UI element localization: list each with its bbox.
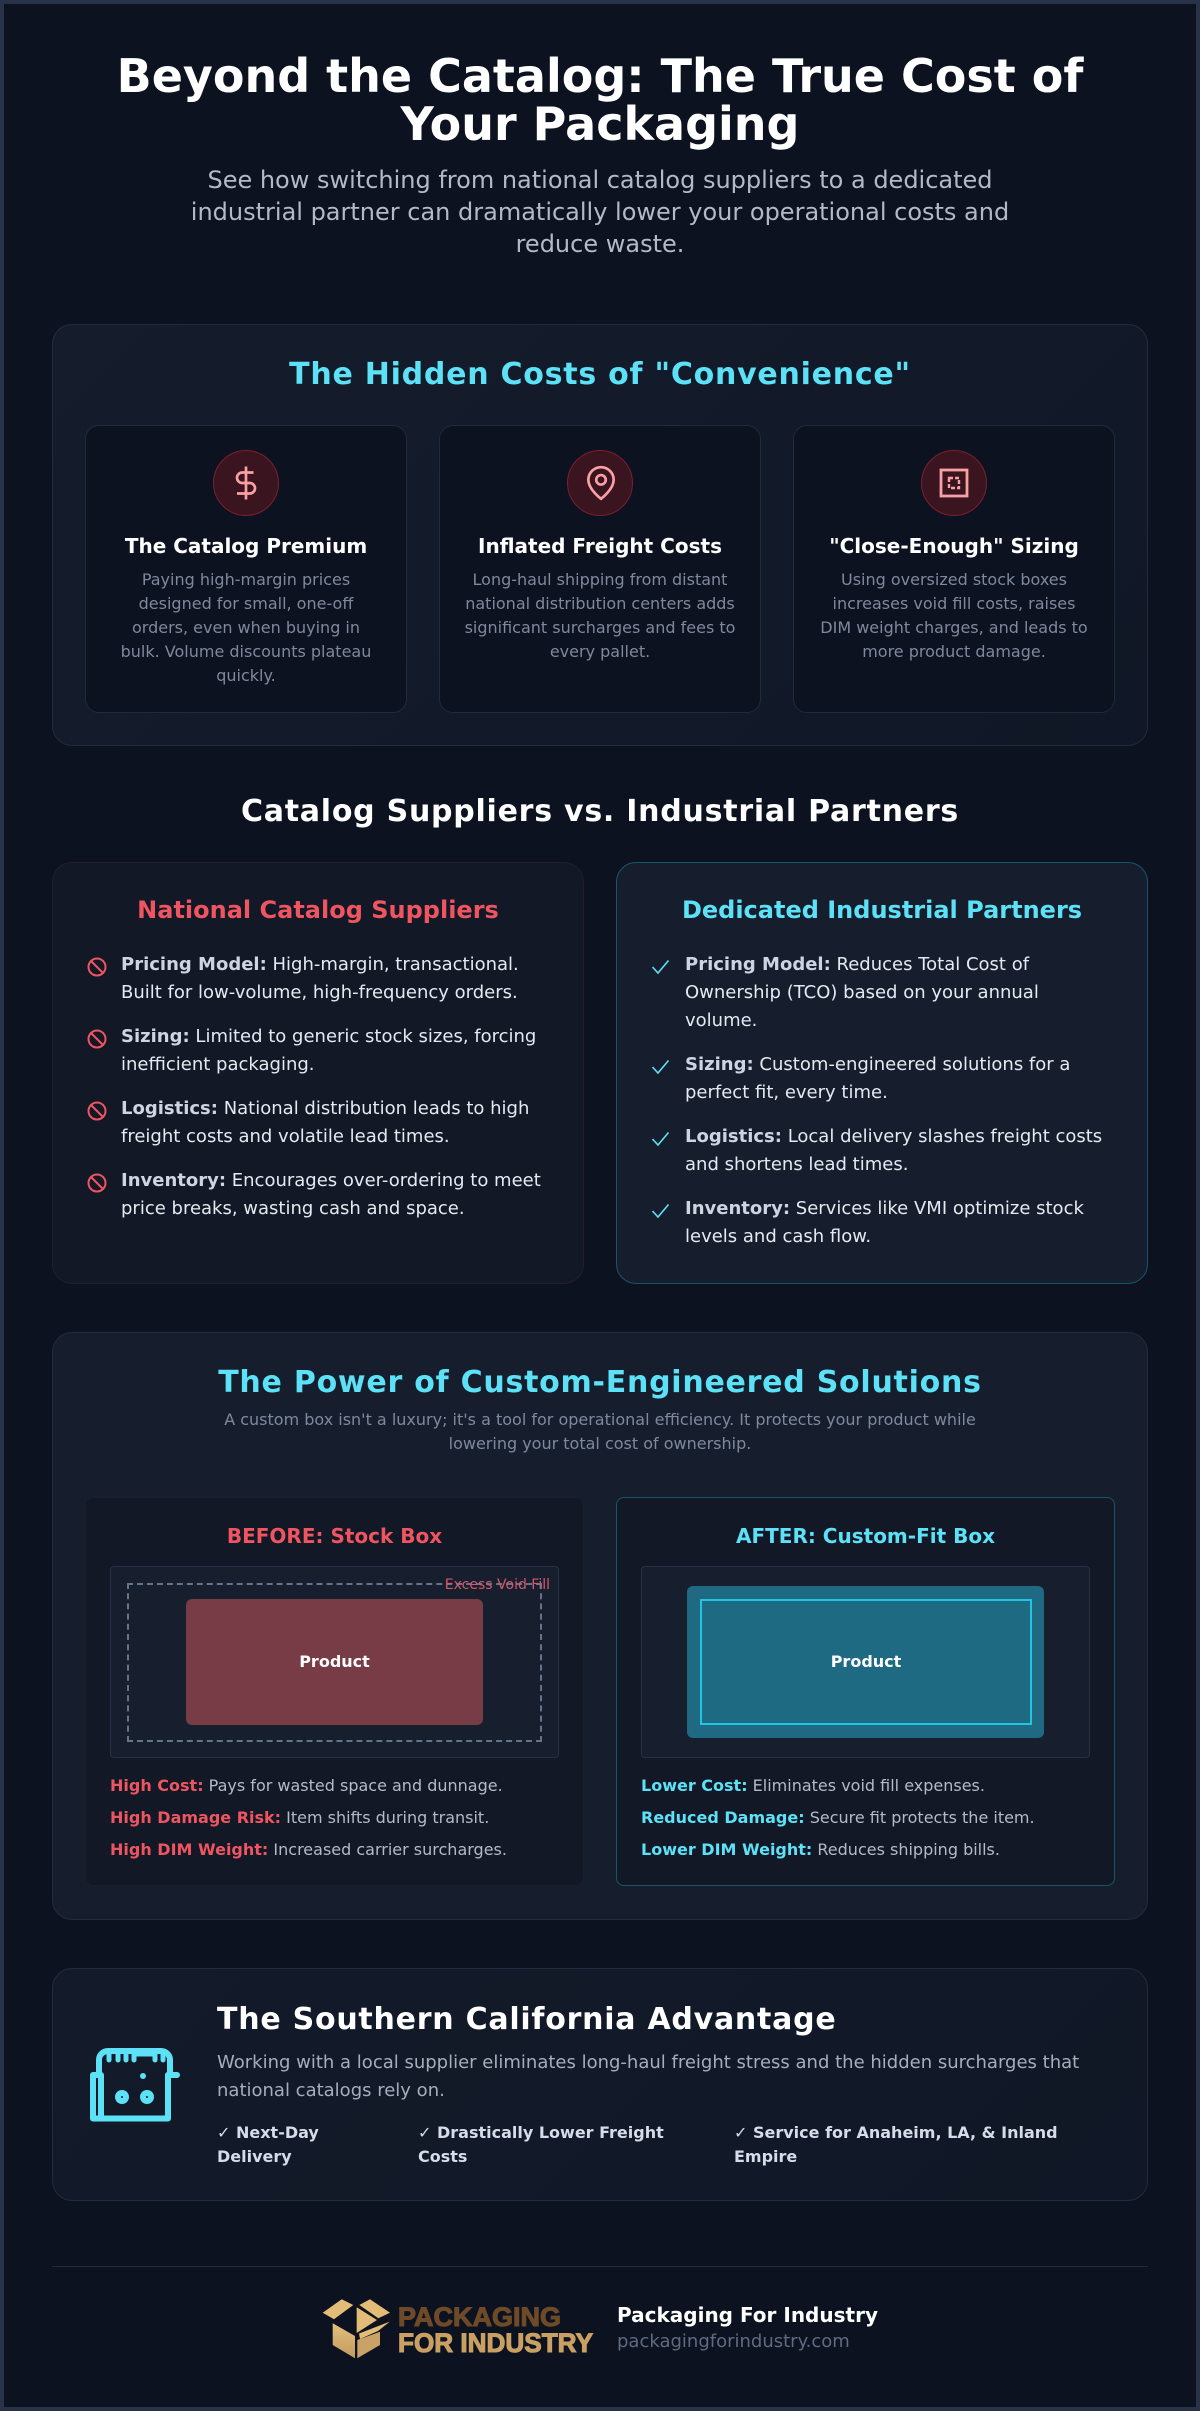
icon: dollar bbox=[213, 450, 279, 516]
intro text: lowering your total cost of ownership. bbox=[449, 1434, 751, 1453]
item text: inefficient packaging. bbox=[121, 1054, 315, 1075]
item text: Logistics: National distribution leads to high bbox=[121, 1098, 529, 1119]
card title: Inflated Freight Costs bbox=[478, 534, 722, 558]
benefit: service area: ✓ Service for Anaheim, LA, & Inland bbox=[734, 2123, 1058, 2142]
card text: Long-haul shipping from distant bbox=[473, 570, 727, 589]
subtitle: See how switching from national catalog suppliers to a dedicated bbox=[207, 166, 993, 194]
benefit: next-day: ✓ Next-Day bbox=[217, 2123, 319, 2142]
item text bbox=[121, 1026, 536, 1075]
item text bbox=[121, 1098, 529, 1147]
intro text: A custom box isn't a luxury; it's a tool for operational efficiency. It protects your product while bbox=[224, 1410, 976, 1429]
benefit: service area: Empire bbox=[734, 2147, 797, 2166]
item text bbox=[685, 1126, 1102, 1175]
benefit: freight: Costs bbox=[418, 2147, 467, 2166]
outer box dashed bbox=[127, 1583, 542, 1742]
item: pricing model bbox=[652, 954, 1039, 1031]
item text: price breaks, wasting cash and space. bbox=[121, 1198, 465, 1219]
item: sizing bbox=[88, 1026, 536, 1075]
point: cost: Lower Cost: Eliminates void fill expenses. bbox=[641, 1776, 985, 1795]
card text: national distribution centers adds bbox=[465, 594, 735, 613]
card: inflated freight bbox=[439, 425, 761, 713]
heading: National Catalog Suppliers bbox=[137, 896, 499, 924]
card text: bulk. Volume discounts plateau bbox=[121, 642, 371, 661]
item: sizing bbox=[652, 1054, 1070, 1103]
card text bbox=[121, 570, 371, 685]
card text: designed for small, one-off bbox=[139, 594, 353, 613]
item text bbox=[121, 1170, 541, 1219]
item text: Inventory: Encourages over-ordering to meet bbox=[121, 1170, 541, 1191]
panel: southern california advantage bbox=[52, 1968, 1148, 2201]
item text: levels and cash flow. bbox=[685, 1226, 871, 1247]
item text bbox=[685, 1198, 1084, 1247]
card: after custom-fit box bbox=[616, 1497, 1115, 1886]
body text bbox=[217, 2052, 1079, 2101]
item text: Built for low-volume, high-frequency orders. bbox=[121, 982, 518, 1003]
benefit: next-day bbox=[217, 2123, 319, 2166]
point: weight: High DIM Weight: Increased carrier surcharges. bbox=[110, 1840, 507, 1859]
heading: hidden costs: The Hidden Costs of "Convenience" bbox=[289, 356, 911, 392]
logo: packaging for industry: FOR INDUSTRY bbox=[398, 2328, 593, 2358]
item text: Pricing Model: Reduces Total Cost of bbox=[685, 954, 1029, 975]
diagram: stock box bbox=[110, 1566, 559, 1758]
subtitle: industrial partner can dramatically lower your operational costs and bbox=[191, 198, 1009, 226]
card: catalog premium bbox=[85, 425, 407, 713]
icon: ban bbox=[88, 1030, 106, 1048]
benefit: next-day: Delivery bbox=[217, 2147, 292, 2166]
card text: increases void fill costs, raises bbox=[833, 594, 1075, 613]
logo: packaging for industry: PACKAGING bbox=[398, 2302, 561, 2332]
item text: Sizing: Custom-engineered solutions for a bbox=[685, 1054, 1070, 1075]
icon: check bbox=[652, 1060, 669, 1074]
item text: Sizing: Limited to generic stock sizes, forcing bbox=[121, 1026, 536, 1047]
icon: ban bbox=[88, 1174, 106, 1192]
card text: significant surcharges and fees to bbox=[465, 618, 735, 637]
body text: Working with a local supplier eliminates long-haul freight stress and the hidden surcharges that bbox=[217, 2052, 1079, 2073]
card text bbox=[820, 570, 1088, 661]
product label: Product bbox=[831, 1652, 901, 1671]
icon: delivery truck bbox=[90, 2048, 180, 2122]
icon: oversized box bbox=[921, 450, 987, 516]
panel: national catalog suppliers bbox=[52, 862, 584, 1284]
product bbox=[186, 1599, 483, 1725]
heading: The Power of Custom-Engineered Solutions bbox=[218, 1364, 982, 1400]
icon: ban bbox=[88, 1102, 106, 1120]
heading: Dedicated Industrial Partners bbox=[682, 896, 1082, 924]
panel: dedicated industrial partners bbox=[616, 862, 1148, 1284]
title: Your Packaging bbox=[401, 97, 799, 151]
product bbox=[700, 1599, 1032, 1725]
icon: map pin bbox=[567, 450, 633, 516]
item text: and shortens lead times. bbox=[685, 1154, 908, 1175]
title: Beyond the Catalog: The True Cost of bbox=[117, 49, 1083, 103]
card title: "Close-Enough" Sizing bbox=[829, 534, 1079, 558]
icon: check bbox=[652, 1132, 669, 1146]
subtitle bbox=[191, 166, 1009, 258]
panel: hidden costs bbox=[52, 324, 1148, 746]
title bbox=[117, 49, 1084, 151]
item text: Logistics: Local delivery slashes freight costs bbox=[685, 1126, 1102, 1147]
card: close-enough sizing bbox=[793, 425, 1115, 713]
benefit: freight bbox=[418, 2123, 664, 2166]
point: cost: High Cost: Pays for wasted space and dunnage. bbox=[110, 1776, 503, 1795]
item: logistics bbox=[88, 1098, 529, 1147]
card text: every pallet. bbox=[550, 642, 650, 661]
item: inventory bbox=[88, 1170, 541, 1219]
card text: DIM weight charges, and leads to bbox=[820, 618, 1088, 637]
item text: Pricing Model: High-margin, transactional. bbox=[121, 954, 519, 975]
item: logistics bbox=[652, 1126, 1102, 1175]
logo: packaging for industry bbox=[320, 2296, 596, 2362]
product label: Product bbox=[299, 1652, 370, 1671]
item: pricing model bbox=[88, 954, 519, 1003]
card text: quickly. bbox=[216, 666, 276, 685]
heading: AFTER: Custom-Fit Box bbox=[736, 1524, 995, 1548]
card text bbox=[465, 570, 735, 661]
benefit: service area bbox=[734, 2121, 1058, 2169]
item text bbox=[685, 1054, 1070, 1103]
diagram: custom box bbox=[641, 1566, 1090, 1758]
heading: The Southern California Advantage bbox=[217, 2002, 836, 2036]
card text: more product damage. bbox=[862, 642, 1046, 661]
item text: perfect fit, every time. bbox=[685, 1082, 888, 1103]
icon: ban bbox=[88, 958, 106, 976]
benefit: freight: ✓ Drastically Lower Freight bbox=[418, 2123, 664, 2142]
icon: check bbox=[652, 1204, 669, 1218]
footer company name: Packaging For Industry bbox=[617, 2303, 878, 2327]
item text: volume. bbox=[685, 1010, 757, 1031]
point: damage: High Damage Risk: Item shifts during transit. bbox=[110, 1808, 489, 1827]
heading: BEFORE: Stock Box bbox=[227, 1524, 442, 1548]
icon: check bbox=[652, 960, 669, 974]
card text: orders, even when buying in bbox=[132, 618, 360, 637]
item text: freight costs and volatile lead times. bbox=[121, 1126, 450, 1147]
point: weight: Lower DIM Weight: Reduces shipping bills. bbox=[641, 1840, 1000, 1859]
subtitle: reduce waste. bbox=[516, 230, 684, 258]
item text bbox=[685, 954, 1039, 1031]
item: inventory bbox=[652, 1198, 1084, 1247]
card title: The Catalog Premium bbox=[125, 534, 367, 558]
point: damage: Reduced Damage: Secure fit protects the item. bbox=[641, 1808, 1035, 1827]
panel: custom-engineered solutions bbox=[52, 1332, 1148, 1920]
footer url: packagingforindustry.com bbox=[617, 2331, 850, 2352]
body text: national catalogs rely on. bbox=[217, 2080, 445, 2101]
item text: Ownership (TCO) based on your annual bbox=[685, 982, 1039, 1003]
item text bbox=[121, 954, 519, 1003]
intro text bbox=[224, 1410, 976, 1453]
void fill label: Excess Void Fill bbox=[445, 1576, 550, 1592]
outer box bbox=[687, 1586, 1044, 1738]
card: before stock box bbox=[85, 1497, 584, 1886]
item text: Inventory: Services like VMI optimize stock bbox=[685, 1198, 1084, 1219]
card text: Paying high-margin prices bbox=[142, 570, 350, 589]
heading: comparison: Catalog Suppliers vs. Industrial Partners bbox=[241, 794, 959, 828]
card text: Using oversized stock boxes bbox=[841, 570, 1067, 589]
